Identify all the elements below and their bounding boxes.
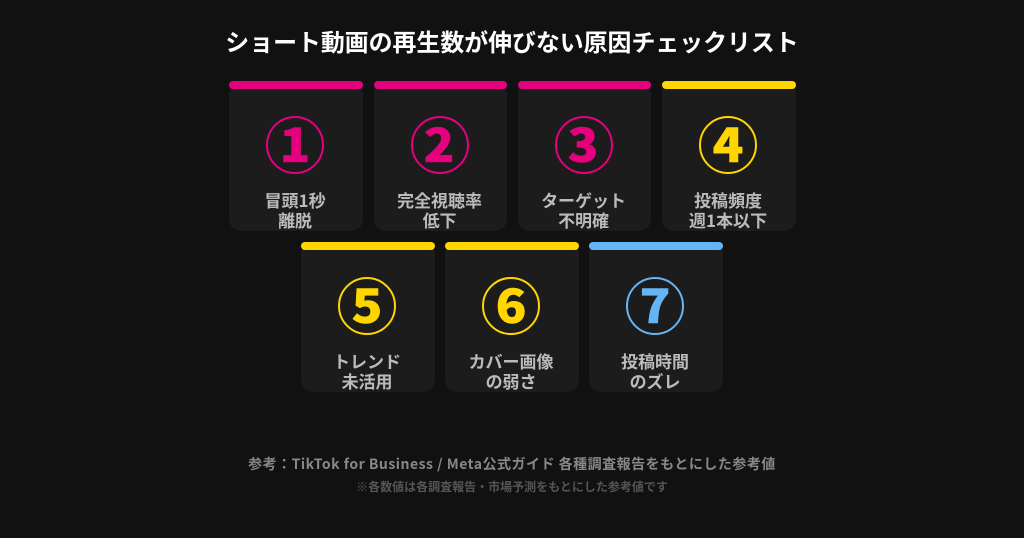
label 7: 投稿時間 [621,348,689,372]
number badge 1: 1 [279,110,310,176]
accent bar 7 [589,242,722,250]
panel: card 3 [518,81,651,231]
label 3: ターゲット [541,186,626,212]
number badge 2 [410,116,468,174]
label 4: 投稿頻度 [694,186,762,212]
accent bar 2 [374,81,507,89]
number badge 6: 6 [495,271,526,337]
label 1: 冒頭1秒 [265,186,326,212]
accent bar 5 [301,242,434,250]
number badge 3: 3 [568,110,599,176]
label 2: 低下 [423,207,457,232]
number badge 7: 7 [639,271,670,337]
label 7: のズレ [630,368,681,393]
label 1 [265,186,326,232]
panel: card 1 [229,81,362,231]
number badge 1 [266,116,324,174]
number badge 4 [699,116,757,174]
label 5 [333,348,401,393]
accent bar 1 [229,81,362,89]
label 6: カバー画像 [469,348,554,372]
label 4 [689,186,767,232]
panel: card 5 [301,242,434,392]
label 2: 完全視聴率 [397,186,482,212]
accent bar 4 [662,81,796,89]
label 5: トレンド [333,348,401,372]
number badge 6 [482,277,540,335]
source text: 参考：TikTok for Business / Meta公式ガイド 各種調査報告をもとにした参考値 [248,454,776,474]
label 5: 未活用 [342,368,393,393]
title: ショート動画の再生数が伸びない原因チェックリスト [225,22,799,58]
panel: card 2 [374,81,507,231]
panel: card 4 [662,81,796,231]
label 7 [621,348,689,393]
number badge 5: 5 [351,271,382,337]
number badge 2: 2 [424,110,455,176]
label 3 [541,186,626,232]
panel: card 7 [589,242,722,392]
accent bar 6 [445,242,578,250]
number badge 7 [626,277,684,335]
label 6 [469,348,554,393]
panel: card 6 [445,242,578,392]
label 1: 離脱 [278,207,312,232]
label 2 [397,186,482,232]
footnote: ※各数値は各調査報告・市場予測をもとにした参考値です [356,478,668,495]
number badge 5 [338,277,396,335]
label 3: 不明確 [558,207,609,232]
number badge 3 [554,116,612,174]
label 6: の弱さ [486,368,537,393]
number badge 4: 4 [712,110,743,176]
label 4: 週1本以下 [689,207,767,232]
accent bar 3 [518,81,651,89]
